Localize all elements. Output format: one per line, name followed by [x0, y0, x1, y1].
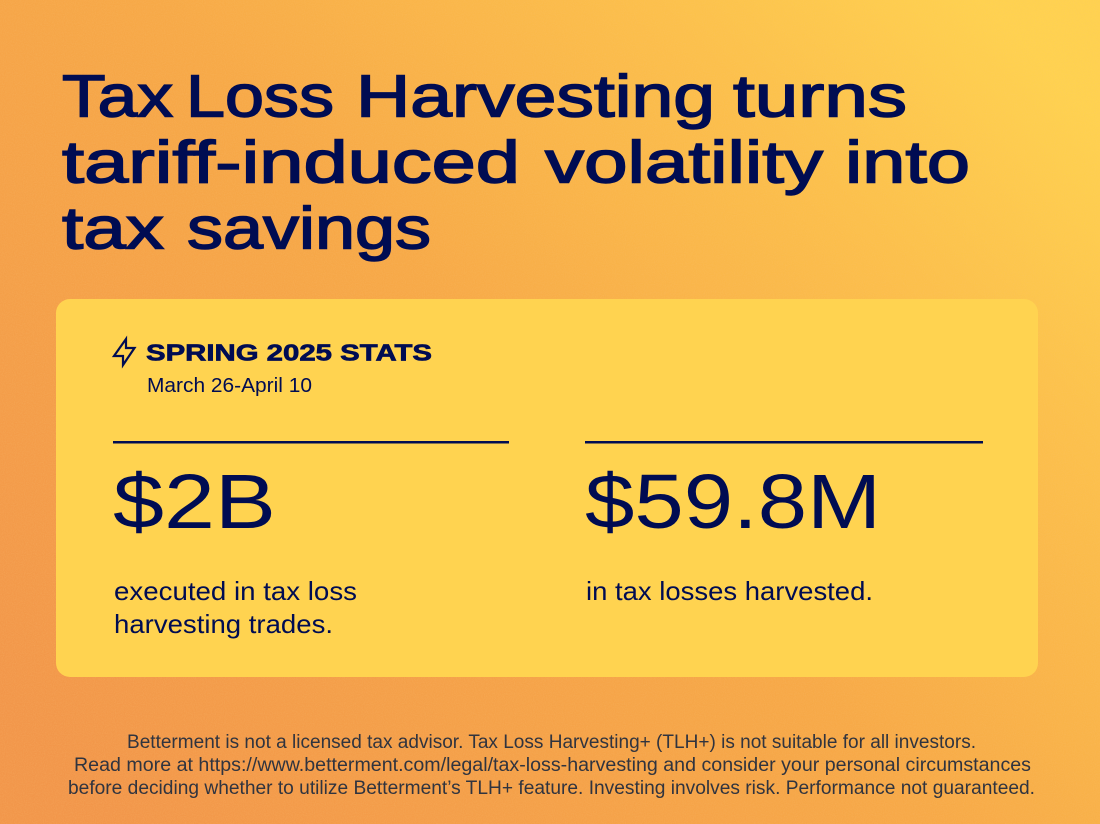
stat: losses harvested: $59.8M	[585, 459, 881, 545]
disclaimer: Betterment is not a licensed tax advisor. Tax Loss Harvesting+ (TLH+) is not suitable for all investors.	[127, 732, 976, 753]
title: volatility	[545, 130, 824, 196]
stat: executed trades: executed in tax loss	[114, 576, 357, 606]
disclaimer	[68, 732, 1035, 799]
title: Loss	[186, 64, 334, 130]
stat: executed trades: harvesting trades.	[114, 609, 333, 639]
title: Tax	[62, 64, 173, 130]
date range: March 26-April 10	[147, 375, 312, 397]
stat: losses harvested	[585, 441, 983, 606]
stat: losses harvested: in tax losses harvested.	[586, 576, 873, 606]
disclaimer: Read more at https://www.betterment.com/legal/tax-loss-harvesting and consider your personal circumstances	[74, 755, 1031, 776]
title: tariff-induced	[62, 130, 520, 196]
title: savings	[187, 196, 431, 262]
disclaimer: before deciding whether to utilize Betterment’s TLH+ feature. Investing involves risk. Performance not guaranteed.	[68, 778, 1035, 799]
stat: executed trades: $2B	[113, 459, 276, 545]
panel: spring 2025 stats	[56, 299, 1038, 677]
title: Harvesting	[356, 64, 715, 130]
stat: executed trades	[113, 441, 509, 639]
icon: lightning bolt	[114, 339, 134, 365]
title: turns	[733, 64, 907, 130]
title	[62, 64, 970, 262]
title: tax	[62, 196, 164, 262]
title: into	[845, 130, 970, 196]
panel heading: SPRING 2025 STATS	[146, 340, 432, 366]
